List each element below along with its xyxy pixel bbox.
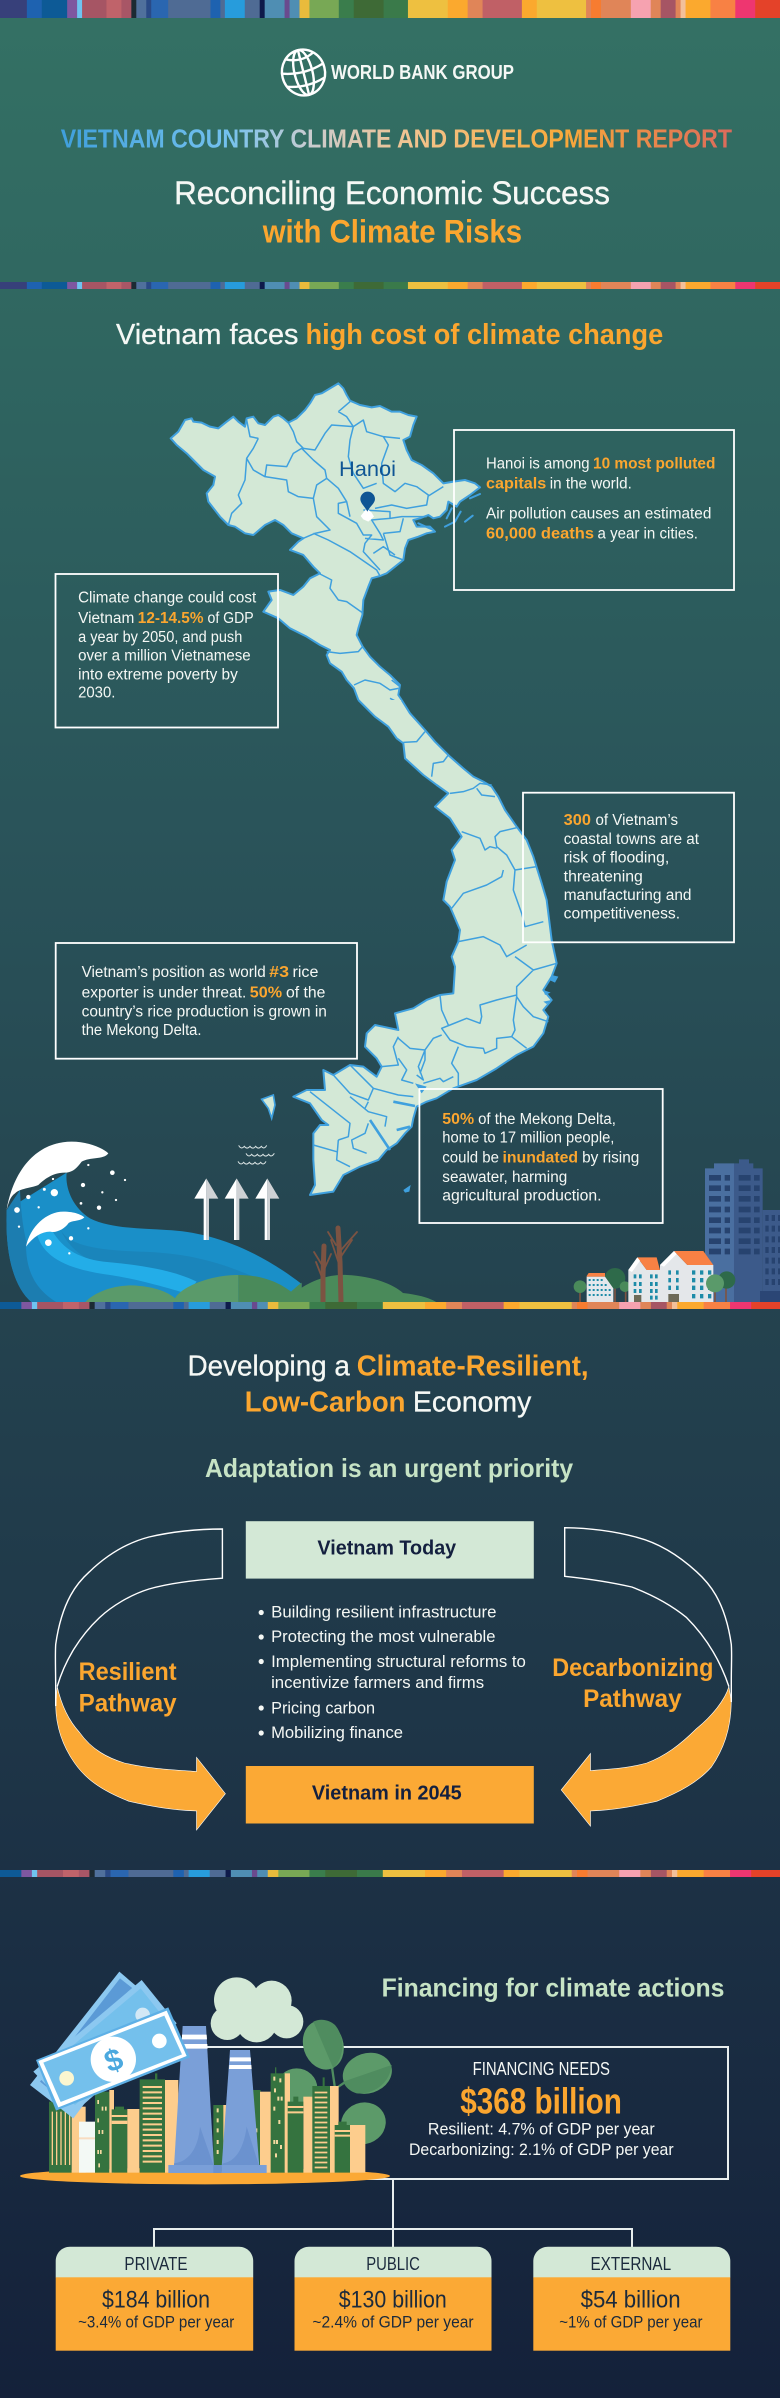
trees [323, 1228, 341, 1302]
small crest foam [26, 1212, 84, 1247]
callout: Mekong inundation: of the Mekong Delta, [478, 1111, 616, 1128]
callout: coastal towns: 300 [564, 812, 591, 829]
white houses [628, 1251, 713, 1302]
illustration: city, smokestacks and money [20, 1972, 397, 2184]
right trees [718, 1271, 735, 1289]
card: private: PRIVATE [124, 2254, 188, 2274]
main heading: Reconciling Economic Success [174, 175, 610, 211]
plants [276, 2015, 397, 2151]
callout: air pollution [454, 430, 734, 590]
card: private: ~3.4% of GDP per year [78, 2313, 235, 2332]
callout: cost of climate change: 2030. [78, 685, 115, 702]
label: Decarbonizing Pathway [552, 1654, 713, 1713]
icon: water ripples [238, 1145, 274, 1164]
Phu Quoc island [262, 1095, 275, 1118]
callout: air pollution: 10 most polluted [593, 455, 715, 472]
logo wordmark: WORLD BANK GROUP [331, 62, 514, 84]
callout: Mekong inundation: agricultural production. [442, 1188, 602, 1205]
colour stripe 2 [0, 282, 780, 289]
colour stripe 3 [0, 1302, 780, 1309]
smokestacks [168, 2026, 267, 2173]
callout: cost of climate change: 12-14.5% [138, 610, 204, 627]
subheading: adaptation: Adaptation is an urgent priority [205, 1453, 574, 1483]
action list: Protecting the most vulnerable [271, 1628, 496, 1646]
section heading: high cost [116, 319, 663, 351]
small apartment block [587, 1277, 613, 1302]
illustration: city [574, 1159, 780, 1302]
left buildings [49, 2073, 178, 2173]
wave body [6, 1173, 302, 1302]
callout: Mekong inundation: seawater, harming [442, 1169, 567, 1186]
action list: Implementing structural reforms to [271, 1653, 526, 1671]
arrow: resilient pathway [55, 1529, 225, 1830]
callout: cost of climate change: Vietnam [78, 610, 134, 627]
card: private [56, 2247, 253, 2351]
label: Resilient Pathway: Resilient [79, 1658, 177, 1686]
callout: air pollution: capitals [486, 476, 546, 493]
callout: coastal towns [523, 793, 734, 942]
Hanoi city area [361, 508, 374, 522]
callout: coastal towns: competitiveness. [564, 906, 680, 923]
callout: rice exporter: #3 [269, 964, 289, 981]
plate [20, 2168, 390, 2184]
callout: coastal towns: risk of flooding, [564, 850, 669, 867]
action list [259, 1603, 526, 1742]
section heading: high cost: Vietnam faces [116, 319, 298, 351]
card: external: ~1% of GDP per year [559, 2313, 703, 2332]
top colour stripe [0, 0, 780, 18]
label: Decarbonizing Pathway: Decarbonizing [552, 1654, 713, 1682]
callout: coastal towns: coastal towns are at [564, 831, 700, 848]
card: public: ~2.4% of GDP per year [312, 2313, 474, 2332]
callout: Mekong inundation: by rising [582, 1150, 639, 1167]
colour stripe 4 [0, 1870, 780, 1877]
financing needs box: $368 billion [460, 2080, 622, 2121]
callout: Mekong inundation [419, 1089, 663, 1223]
callout: rice exporter [56, 943, 357, 1059]
callout: rice exporter: Vietnam’s position as world [82, 964, 266, 981]
illustration: wave and rising water [6, 1142, 302, 1302]
callout: coastal towns: manufacturing and [564, 887, 692, 904]
report title: VIETNAM COUNTRY CLIMATE AND DEVELOPMENT REPORT [61, 126, 732, 154]
header [61, 45, 732, 250]
map: north [171, 383, 480, 702]
map: south [262, 700, 558, 1195]
callout: air pollution: 60,000 deaths [486, 526, 594, 543]
callout: air pollution: Hanoi is among [486, 455, 590, 472]
wave crest foam [7, 1142, 108, 1210]
box: Vietnam in 2045 [246, 1766, 534, 1824]
north-east islands [418, 494, 480, 530]
map of Vietnam [171, 383, 558, 1195]
callout: cost of climate change: into extreme poverty by [78, 666, 238, 683]
section heading: climate-resilient economy: Low-Carbon [245, 1387, 406, 1419]
box: Vietnam Today [246, 1521, 534, 1579]
section heading: climate-resilient economy [188, 1350, 589, 1419]
callout: cost of climate change: of GDP [208, 610, 254, 627]
callout: rice exporter: exporter is under threat. [82, 984, 246, 1001]
card: external: $54 billion [581, 2286, 681, 2313]
action list: Building resilient infrastructure [271, 1603, 496, 1621]
callout: rice exporter: rice [292, 964, 318, 981]
label: Resilient Pathway [79, 1658, 177, 1717]
Hanoi label: Hanoi [339, 457, 396, 481]
illustration: dead trees and hill [290, 1228, 438, 1303]
tall building [705, 1163, 734, 1302]
financing needs box: FINANCING NEEDS [473, 2059, 610, 2079]
spray droplets [14, 1164, 126, 1254]
card: external [533, 2247, 730, 2351]
pathway diagram [55, 1521, 732, 1830]
icon: banknotes: $ [100, 2042, 128, 2079]
second building [763, 1210, 780, 1302]
callout: cost of climate change: over a million Vietnamese [78, 648, 251, 665]
back buildings [213, 2067, 365, 2173]
icon: arrows showing sea level rise [194, 1178, 279, 1240]
callout: cost of climate change [56, 574, 278, 728]
connector tree [154, 2179, 632, 2247]
card: private: $184 billion [102, 2286, 210, 2313]
financing needs box: Decarbonizing: 2.1% of GDP per year [409, 2140, 674, 2159]
callout: Mekong inundation: inundated [502, 1150, 578, 1167]
financing needs box [206, 2047, 728, 2179]
callout: rice exporter: 50% [250, 984, 282, 1001]
callout: cost of climate change: a year by 2050, and push [78, 629, 242, 646]
section heading: climate-resilient economy: Economy [413, 1387, 532, 1419]
callout: air pollution: a year in cities. [598, 526, 698, 543]
callout: air pollution: in the world. [550, 476, 632, 493]
section heading: financing: Financing for climate actions [382, 1973, 724, 2003]
card: public [294, 2247, 492, 2351]
callout: rice exporter: country’s rice production is grown in [82, 1003, 327, 1020]
card: public: PUBLIC [366, 2254, 420, 2274]
Mekong river channels [370, 1102, 415, 1150]
icon: banknotes [30, 1972, 190, 2118]
callout: cost of climate change: Climate change could cost [78, 590, 257, 607]
main heading [174, 175, 610, 250]
callout: rice exporter: the Mekong Delta. [82, 1022, 202, 1039]
green hills [85, 1275, 238, 1302]
action list: incentivize farmers and firms [271, 1674, 484, 1692]
callout: Mekong inundation: home to 17 million people, [442, 1130, 614, 1147]
callout: coastal towns: of Vietnam’s [596, 812, 678, 829]
section heading: climate-resilient economy: Climate-Resilient, [357, 1350, 589, 1382]
section heading: high cost: high cost of climate change [306, 319, 663, 351]
callout: air pollution: Air pollution causes an estimated [486, 506, 711, 523]
callout: rice exporter: of the [286, 984, 325, 1001]
action list: Pricing carbon [271, 1699, 375, 1717]
callout: coastal towns: threatening [564, 868, 643, 885]
card: external: EXTERNAL [590, 2254, 671, 2274]
box: Vietnam in 2045: Vietnam in 2045 [312, 1782, 462, 1804]
arrow: decarbonizing pathway [561, 1528, 732, 1826]
smoke cloud [211, 1977, 303, 2042]
icon: Hanoi location pin [360, 492, 375, 512]
callout: Mekong inundation: 50% [442, 1111, 474, 1128]
icon: globe [277, 45, 330, 100]
financing needs box: Resilient: 4.7% of GDP per year [428, 2120, 655, 2139]
section heading: climate-resilient economy: Developing a [188, 1350, 350, 1382]
hill [290, 1275, 438, 1303]
action list: Mobilizing finance [271, 1724, 403, 1742]
main heading: with Climate Risks [262, 214, 522, 250]
callout: Mekong inundation: could be [442, 1150, 499, 1167]
small trees [580, 1280, 726, 1302]
World Bank Group logo [277, 45, 514, 100]
label: Resilient Pathway: Pathway [79, 1689, 177, 1717]
box: Vietnam Today: Vietnam Today [317, 1538, 457, 1560]
east coast islands [403, 975, 558, 1193]
label: Decarbonizing Pathway: Pathway [583, 1685, 682, 1713]
card: public: $130 billion [339, 2286, 447, 2313]
